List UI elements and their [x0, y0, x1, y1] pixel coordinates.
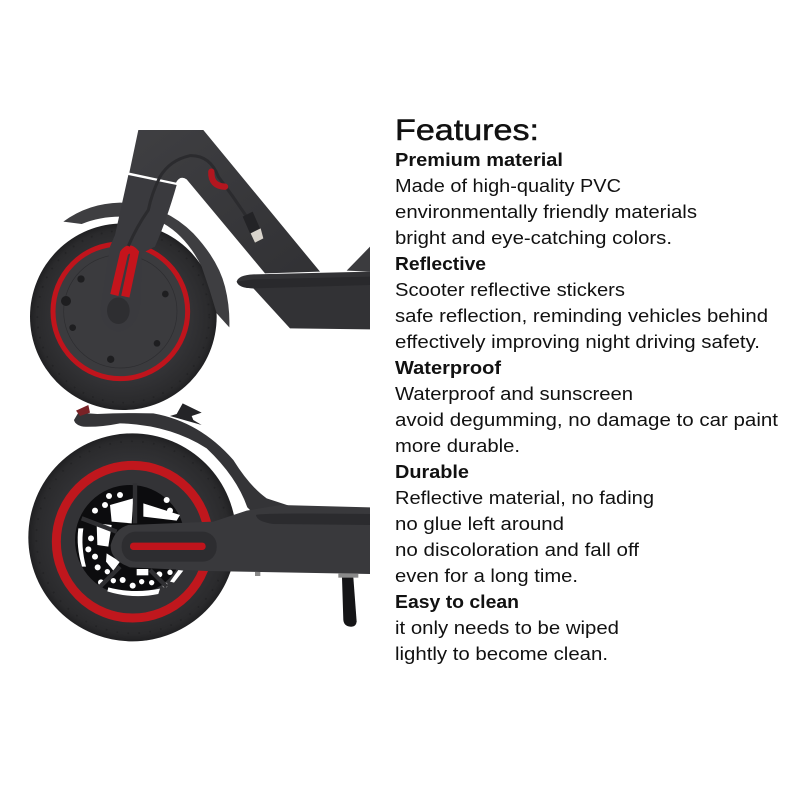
feature: durable: Durable [395, 462, 469, 482]
feature: reflective: Reflective [395, 254, 486, 274]
rear tire [28, 433, 236, 641]
rear mudguard [74, 413, 290, 513]
feature: premium material [395, 150, 697, 248]
feature: easy to clean: lightly to become clean. [395, 644, 608, 664]
rear tread [36, 441, 228, 633]
red reflective ring: front [53, 244, 188, 379]
brake disc [75, 483, 185, 596]
rear hub [60, 469, 205, 614]
tire tread [37, 231, 209, 403]
feature: premium material: Premium material [395, 150, 563, 170]
feature: waterproof [395, 358, 778, 456]
front hub [55, 246, 186, 377]
rear deck [111, 505, 370, 574]
fork axle cap [107, 297, 130, 324]
feature: premium material: Made of high-quality PVC [395, 176, 621, 196]
red reflective ring: rear [56, 465, 209, 618]
red bar reflector [130, 543, 206, 550]
feature: durable: no discoloration and fall off [395, 540, 640, 560]
deck lip [256, 514, 370, 525]
feature: easy to clean: Easy to clean [395, 592, 519, 612]
title: Features: [395, 114, 539, 147]
feature: waterproof: Waterproof and sunscreen [395, 384, 633, 404]
feature: reflective: Scooter reflective stickers [395, 280, 625, 300]
front deck [237, 247, 370, 329]
feature: easy to clean: it only needs to be wiped [395, 618, 619, 638]
features text block [395, 114, 778, 664]
feature: premium material: bright and eye-catching colors. [395, 228, 672, 248]
usb plug [243, 212, 263, 243]
feature: reflective: safe reflection, reminding vehicles behind [395, 306, 768, 326]
hub bolts [61, 275, 169, 363]
feature: durable: Reflective material, no fading [395, 488, 654, 508]
feature: reflective: effectively improving night driving safety. [395, 332, 760, 352]
photo: front wheel of scooter [30, 130, 370, 410]
feature: reflective [395, 254, 768, 352]
kickstand [255, 572, 358, 627]
feature: waterproof: avoid degumming, no damage to car paint [395, 410, 778, 430]
feature: waterproof: more durable. [395, 436, 520, 456]
red hook [211, 172, 225, 187]
feature: durable [395, 462, 654, 586]
front mudguard [63, 203, 229, 327]
front fork [101, 175, 177, 332]
guard bracket [170, 403, 202, 425]
deck folding arm [129, 130, 320, 273]
cable [128, 156, 247, 246]
front tire [30, 223, 217, 410]
feature: durable: no glue left around [395, 514, 564, 534]
reflector cover [122, 532, 217, 562]
feature: waterproof: Waterproof [395, 358, 502, 378]
feature: easy to clean [395, 592, 619, 664]
photo: rear wheel of scooter [28, 403, 370, 641]
tail light [76, 405, 90, 416]
feature: durable: even for a long time. [395, 566, 578, 586]
hub inner line [64, 255, 177, 368]
red U reflector on fork [114, 249, 135, 297]
feature: premium material: environmentally friendly materials [395, 202, 697, 222]
